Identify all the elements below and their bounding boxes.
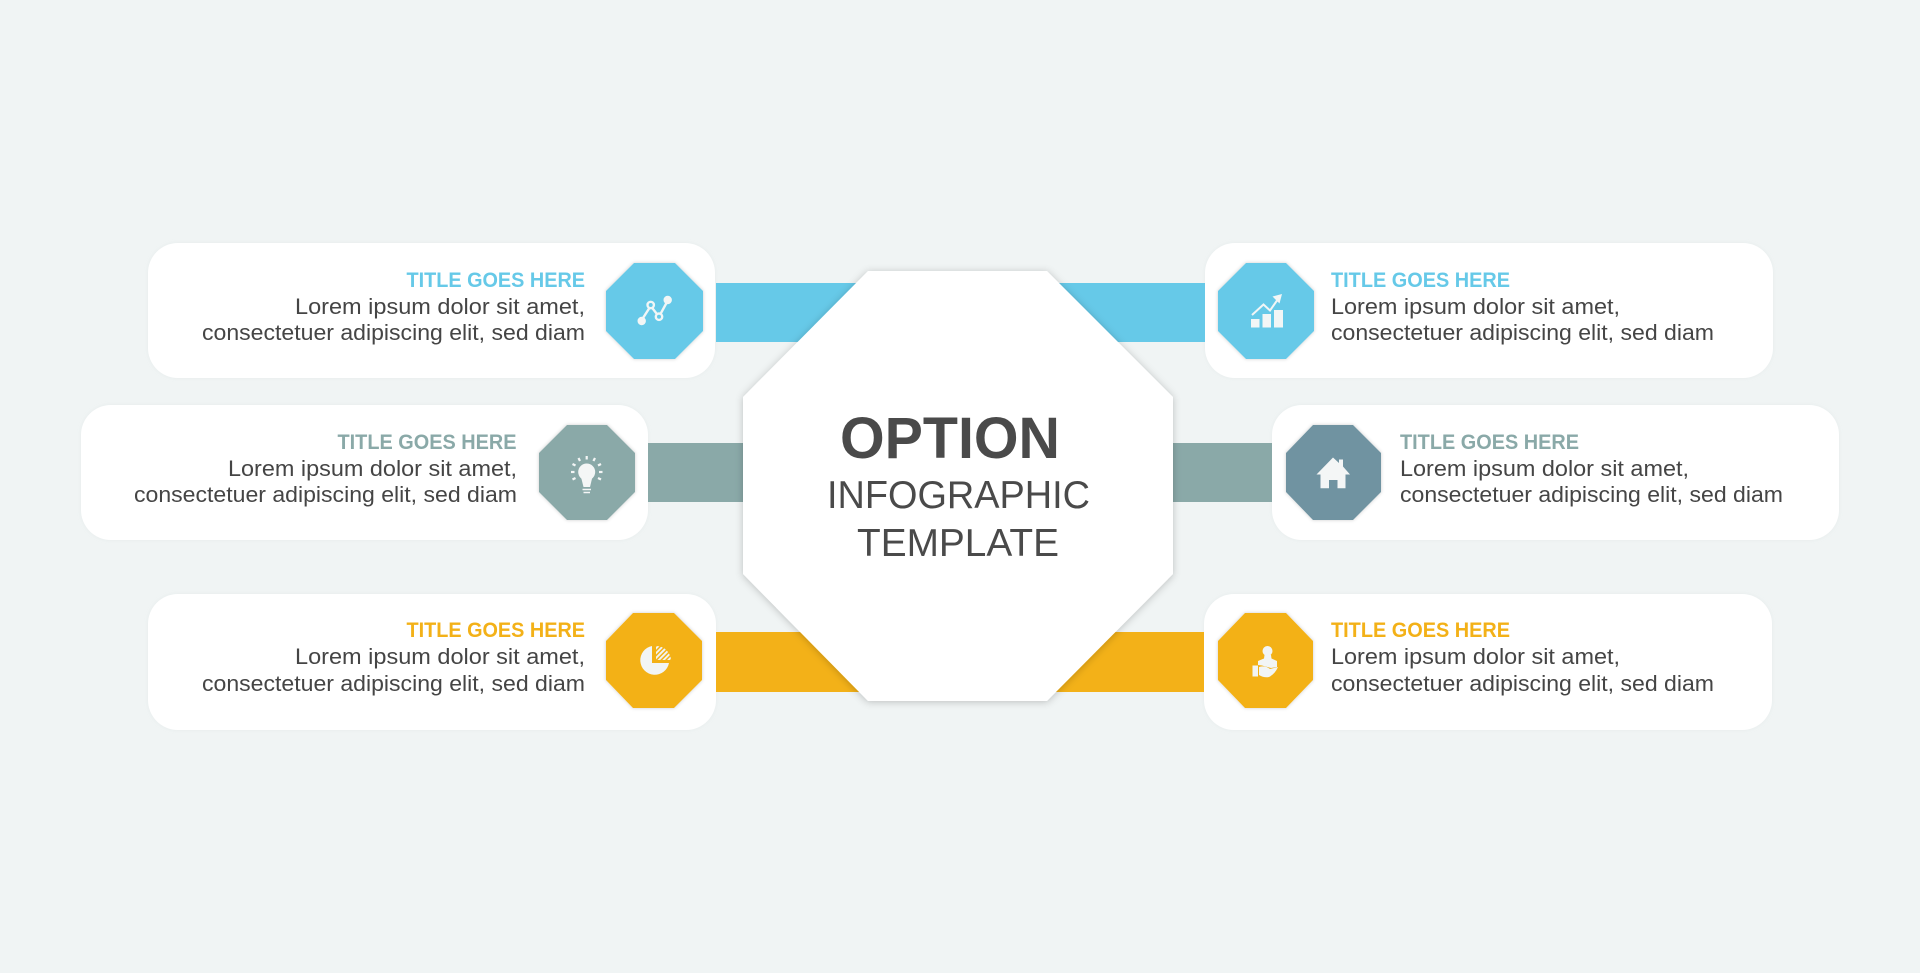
- text block: bottom left body: Lorem ipsum dolor sit amet,: [295, 644, 585, 669]
- heading: INFOGRAPHIC: INFOGRAPHIC: [827, 474, 1090, 517]
- connector: middle right bar: [1160, 443, 1272, 502]
- heading: top left title: TITLE GOES HERE: [406, 269, 585, 292]
- text block: top left body: [202, 294, 585, 345]
- icon: pie chart badge: [606, 613, 702, 708]
- connector: middle left bar: [648, 443, 758, 502]
- text block: top right body: consectetuer adipiscing elit, sed diam: [1331, 320, 1714, 345]
- text block: top right body: Lorem ipsum dolor sit amet,: [1331, 294, 1620, 319]
- text block: bottom left body: consectetuer adipiscing elit, sed diam: [202, 671, 585, 696]
- text block: middle right body: consectetuer adipiscing elit, sed diam: [1400, 482, 1783, 507]
- text block: top left body: Lorem ipsum dolor sit amet,: [295, 294, 585, 319]
- icon: line graph badge: [606, 263, 703, 359]
- text block: middle left body: Lorem ipsum dolor sit amet,: [228, 456, 517, 481]
- text block: middle left body: consectetuer adipiscing elit, sed diam: [134, 482, 517, 507]
- panel: bottom right card: [1204, 594, 1772, 730]
- icon: hand and person badge: [1218, 613, 1313, 708]
- text block: top right body: [1331, 294, 1714, 345]
- connector: bottom right bar: [1030, 632, 1204, 692]
- panel: middle left card: [81, 405, 648, 540]
- text block: middle right body: [1400, 456, 1783, 507]
- heading: bottom left title: TITLE GOES HERE: [406, 619, 585, 642]
- connector: top right bar: [1030, 283, 1205, 342]
- connector: top left bar: [716, 283, 886, 342]
- heading: middle right title: TITLE GOES HERE: [1400, 431, 1579, 454]
- panel: bottom left card: [148, 594, 716, 730]
- text block: middle left body: [134, 456, 517, 507]
- panel: top left card: [148, 243, 715, 378]
- icon: light bulb badge: [539, 425, 635, 520]
- icon: house badge: [1286, 425, 1381, 520]
- panel: middle right card: [1272, 405, 1839, 540]
- panel: top right card: [1205, 243, 1773, 378]
- text block: bottom right body: Lorem ipsum dolor sit amet,: [1331, 644, 1620, 669]
- central octagon: [743, 271, 1173, 701]
- icon: growth chart badge: [1218, 263, 1314, 359]
- text block: top left body: consectetuer adipiscing elit, sed diam: [202, 320, 585, 345]
- heading: OPTION: OPTION: [840, 406, 1060, 471]
- heading: TEMPLATE: TEMPLATE: [857, 522, 1059, 565]
- text block: middle right body: Lorem ipsum dolor sit amet,: [1400, 456, 1689, 481]
- heading: bottom right title: TITLE GOES HERE: [1331, 619, 1510, 642]
- connector: bottom left bar: [716, 632, 886, 692]
- text block: bottom right body: [1331, 644, 1714, 696]
- heading: top right title: TITLE GOES HERE: [1331, 269, 1510, 292]
- text block: bottom right body: consectetuer adipiscing elit, sed diam: [1331, 671, 1714, 696]
- heading: middle left title: TITLE GOES HERE: [338, 431, 516, 454]
- text block: bottom left body: [202, 644, 585, 696]
